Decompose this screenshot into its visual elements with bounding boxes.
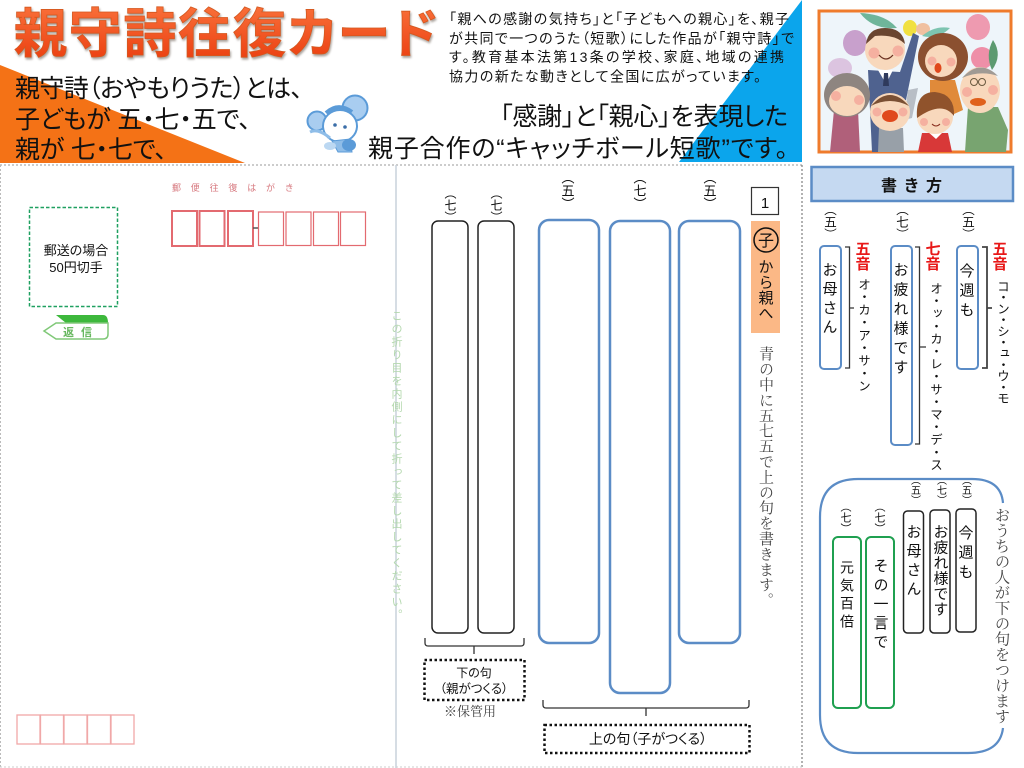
label: lower verse: 下の句 xyxy=(456,666,492,680)
parent verses: 元気百倍 xyxy=(839,560,855,632)
from child to parent tag: 子 xyxy=(758,232,774,250)
how-to example: otsukaresama: 七音 xyxy=(924,241,940,272)
postal code boxes xyxy=(172,211,366,246)
how-to example: otsukaresama: （七） xyxy=(894,203,908,240)
fold instruction: この折り目を内側にして折って差し出してください。 xyxy=(390,310,402,622)
how-to example: otsukaresama: お疲れ様です xyxy=(892,262,908,379)
label: lower verse: （親がつくる） xyxy=(440,681,508,696)
label: upper verse xyxy=(544,725,750,753)
how-to heading: 書 き 方 xyxy=(881,176,943,195)
blue corner triangle xyxy=(679,0,802,162)
label: lower verse xyxy=(424,660,524,700)
description paragraph: す。教育基本法第13条の学校、家庭、地域の連携 xyxy=(449,49,784,65)
child verses: （七） xyxy=(934,475,946,505)
child verses: 今週も xyxy=(956,525,974,584)
how-to example: okaasan: お母さん xyxy=(820,262,838,338)
child writing columns xyxy=(539,171,740,693)
how-to example: konshu-mo xyxy=(957,203,1009,403)
parent verses: その一言で xyxy=(872,558,888,653)
how-to example: okaasan: オ・カ・ア・サ・ン xyxy=(856,278,870,392)
stamp box xyxy=(30,208,118,306)
reply mark xyxy=(44,315,108,339)
instruction: child: 青の中に五七五で上の句を書きます。 xyxy=(757,346,774,608)
intro text: what is oyamori-uta: 子どもが 五・七・五で、 xyxy=(15,106,251,134)
parent writing columns xyxy=(432,187,514,633)
how-to example: okaasan: 五音 xyxy=(854,241,870,272)
child verses: お疲れ様です xyxy=(932,524,948,617)
icon: mascot xyxy=(308,96,368,152)
how-to example: konshu-mo: 五音 xyxy=(990,241,1008,272)
father xyxy=(865,28,919,152)
bracket: upper verse xyxy=(543,700,749,716)
panel: finished example xyxy=(820,475,1003,753)
label: upper verse: 上の句（子がつくる） xyxy=(589,731,707,747)
child writing columns: （七） xyxy=(632,171,646,210)
description paragraph xyxy=(449,11,794,84)
stamp box: 50円切手 xyxy=(49,260,103,275)
how-to heading xyxy=(812,167,1013,201)
description paragraph: が共同で一つのうた（短歌）にした作品が「親守詩」で xyxy=(449,30,794,46)
how-to example: konshu-mo: 今週も xyxy=(958,263,974,322)
family illustration xyxy=(819,11,1011,152)
boy xyxy=(870,88,918,152)
stamp box: 郵送の場合 xyxy=(44,243,108,258)
parent writing columns: （七） xyxy=(443,187,457,223)
how-to example: konshu-mo: コ・ン・シ・ュ・ウ・モ xyxy=(995,280,1009,403)
child writing columns: （五） xyxy=(560,171,574,210)
child writing columns: （五） xyxy=(702,171,716,210)
child verses xyxy=(904,475,976,633)
from child to parent tag xyxy=(751,221,780,333)
return address boxes xyxy=(17,715,134,744)
mother xyxy=(918,33,968,118)
description paragraph: 「親への感謝の気持ち」と「子どもへの親心」を、親子 xyxy=(449,11,789,27)
grandfather xyxy=(960,67,1008,152)
how-to example: otsukaresama: オ・ッ・カ・レ・サ・マ・デ・ス xyxy=(928,282,942,471)
step number: 1 xyxy=(761,195,769,212)
intro text: what is oyamori-uta: 親守詩（おやもりうた）とは、 xyxy=(15,75,303,103)
catchphrase: 「感謝」と「親心」を表現した xyxy=(500,103,788,131)
description paragraph: 協力の新たな動きとして全国に広がっています。 xyxy=(449,68,761,84)
flowers xyxy=(828,13,998,78)
how-to example: okaasan: （五） xyxy=(822,203,836,240)
orange corner triangle xyxy=(0,65,245,163)
reply mark: 返信 xyxy=(63,325,99,339)
child verses: お母さん xyxy=(904,524,922,600)
parent verses xyxy=(833,501,894,708)
how-to example: okaasan xyxy=(820,203,870,392)
parent verses: （七） xyxy=(873,501,886,534)
child verses: （五） xyxy=(960,475,972,505)
catchphrase xyxy=(368,103,788,163)
from child to parent tag: から親へ xyxy=(756,259,774,321)
title: 親守詩往復カード xyxy=(14,5,438,64)
storage note: ※保管用 xyxy=(444,704,496,719)
parent writing columns: （七） xyxy=(489,187,503,223)
intro text: what is oyamori-uta: 親が 七・七で、 xyxy=(15,136,167,164)
postcard heading: 郵便往復はがき xyxy=(172,182,304,193)
child verses: （五） xyxy=(908,475,920,505)
how-to example: konshu-mo: （五） xyxy=(960,203,974,240)
step number xyxy=(752,188,778,214)
instruction: family: おうちの人が下の句をつけます xyxy=(992,507,1010,724)
parent verses: （七） xyxy=(839,501,852,534)
grandmother xyxy=(824,73,870,152)
girl xyxy=(917,92,954,152)
bracket: lower verse xyxy=(425,638,524,654)
how-to example: otsukaresama xyxy=(891,203,942,471)
catchphrase: 親子合作の“キャッチボール短歌”です。 xyxy=(368,135,788,163)
intro text: what is oyamori-uta xyxy=(15,75,303,164)
